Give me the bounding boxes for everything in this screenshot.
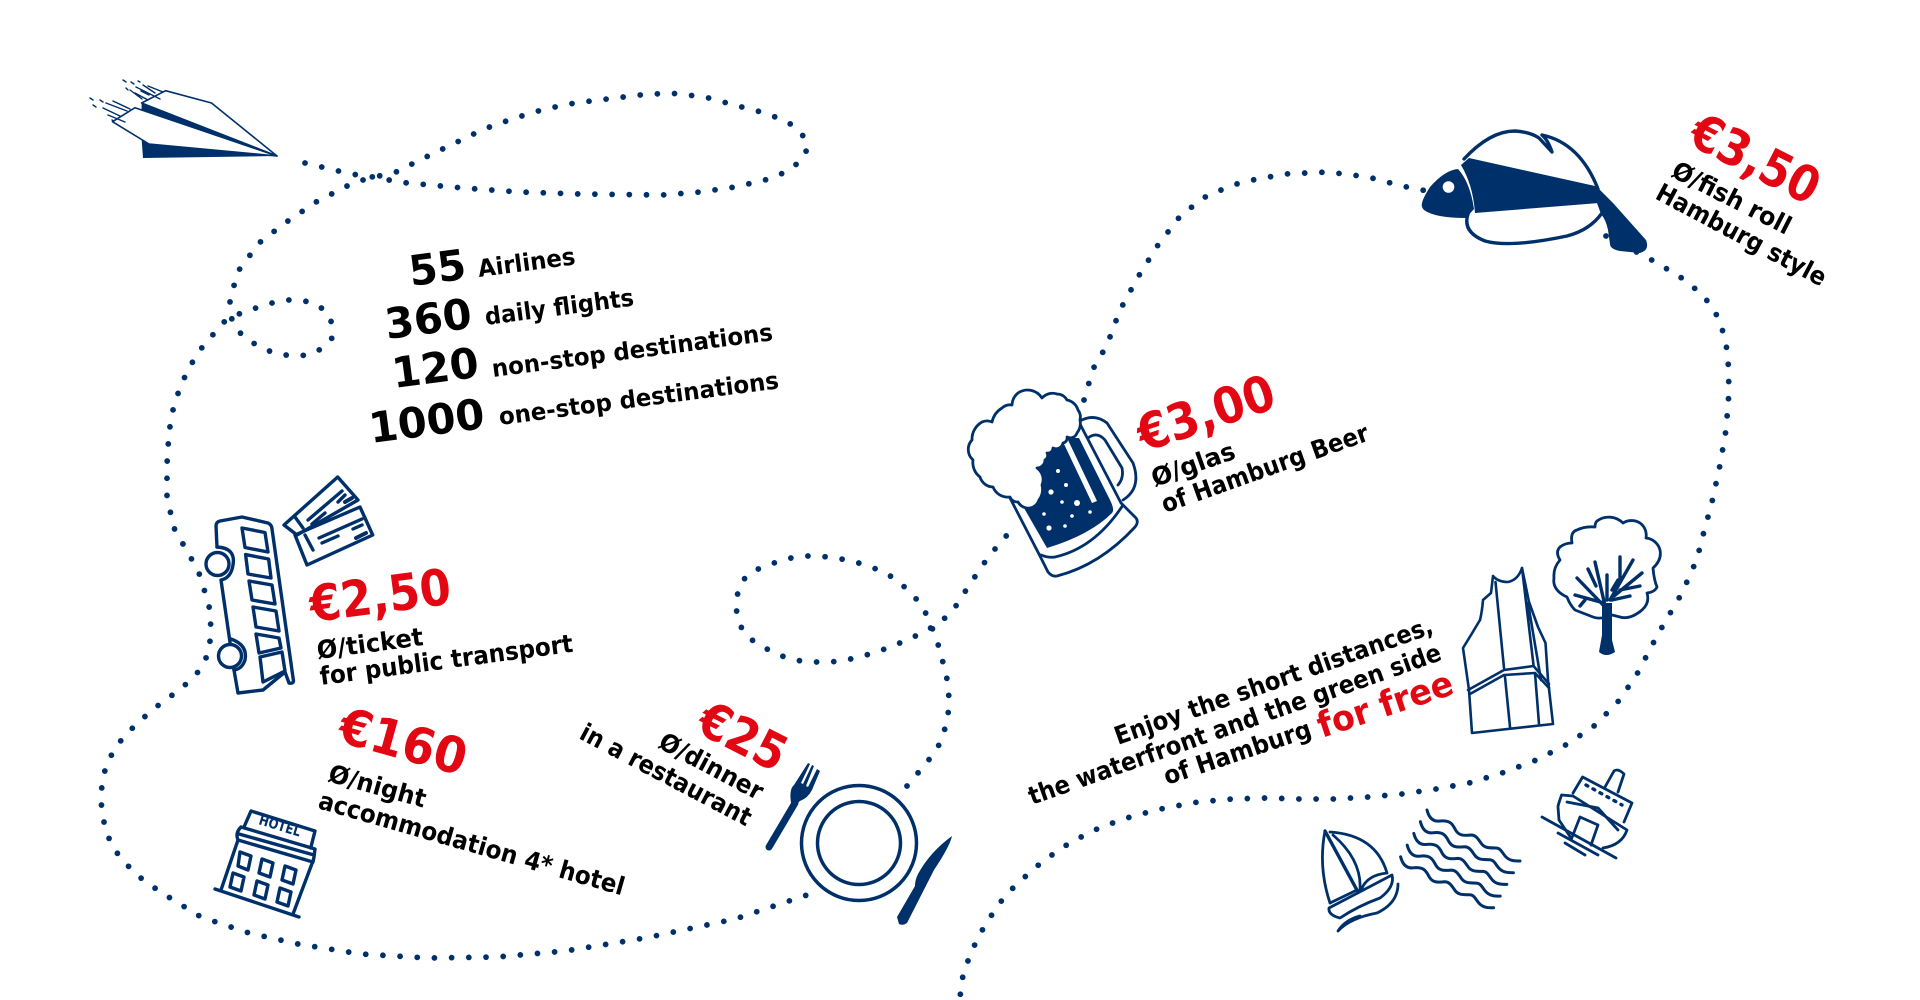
price: public transport: for public transport (318, 629, 575, 691)
stat: airlines: 55 (406, 240, 469, 296)
price: fish roll: Hamburg style (1651, 178, 1832, 292)
stat: daily flights (382, 284, 635, 349)
foam (968, 390, 1080, 508)
icon: fish roll (1422, 131, 1647, 253)
fish bun (1464, 131, 1598, 189)
free highlights text: Enjoy the short distances, (1110, 611, 1437, 751)
bubbles (1042, 469, 1092, 531)
price: fish roll: Ø/fish roll (1667, 156, 1796, 240)
plate (802, 786, 916, 900)
price: fish roll (1651, 102, 1832, 292)
price: restaurant dinner: in a restaurant (575, 718, 757, 832)
icon: sailboat (1322, 831, 1398, 931)
free highlights text: for free (1312, 664, 1459, 747)
icon: hotel (215, 811, 315, 917)
stat: non-stop destinations: 120 (389, 338, 482, 398)
icon: beer mug (968, 390, 1137, 576)
knife (897, 836, 952, 925)
stat: non-stop destinations: non-stop destinations (490, 318, 774, 383)
dotted route: restaurant to beer (736, 528, 1013, 786)
price: accommodation: Ø/night (325, 759, 430, 814)
stat: airlines: Airlines (476, 242, 577, 283)
fish eye (1443, 181, 1454, 193)
price: beer: of Hamburg Beer (1157, 418, 1373, 519)
fork (769, 763, 820, 847)
price: public transport: Ø/ticket (315, 622, 425, 665)
dotted route: airplane to restaurant (101, 93, 810, 958)
beer highlight (1064, 440, 1097, 503)
beer liquid (1024, 438, 1113, 548)
price: beer: €3,00 (1129, 363, 1282, 464)
icon: fork, plate and knife (769, 763, 952, 925)
free highlights text: of Hamburg (1160, 714, 1315, 791)
icon: paper plane (90, 80, 277, 158)
fish band (1461, 158, 1600, 213)
price: beer: Ø/glas (1147, 436, 1239, 493)
stat: non-stop destinations (389, 318, 774, 398)
icon: Elbphilharmonie (1463, 568, 1553, 733)
fish head (1422, 169, 1474, 218)
price: fish roll: €3,50 (1680, 102, 1830, 216)
price: public transport: €2,50 (305, 558, 454, 634)
price: accommodation: €160 (332, 696, 474, 787)
stat: one-stop destinations: 1000 (366, 389, 487, 453)
price: accommodation: accommodation 4* hotel (315, 786, 628, 901)
price: public transport (305, 558, 575, 691)
dotted route: beer to fish roll (1084, 172, 1427, 400)
icon: ship (1542, 770, 1632, 858)
stat: daily flights: 360 (382, 289, 475, 349)
icon: tickets (284, 477, 373, 565)
stats block (366, 240, 780, 453)
stat: one-stop destinations: one-stop destinations (497, 366, 780, 431)
price: restaurant dinner (575, 690, 797, 832)
mug outline (1010, 417, 1137, 576)
price: accommodation (315, 696, 628, 901)
stat: daily flights: daily flights (483, 284, 635, 331)
price: beer (1129, 363, 1373, 519)
free highlights text: the waterfront and the green side (1024, 638, 1445, 811)
stat: airlines (406, 240, 577, 296)
fish tail (1596, 186, 1647, 253)
stat: one-stop destinations (366, 366, 780, 453)
icon: water waves (1401, 810, 1520, 908)
icon: hotel: HOTEL (257, 813, 303, 840)
icon: bus (206, 517, 294, 693)
price: restaurant dinner: Ø/dinner (654, 727, 769, 806)
dotted route: fish roll to bottom edge (960, 236, 1729, 1000)
price: restaurant dinner: €25 (688, 690, 797, 783)
icon: tree (1554, 517, 1660, 655)
